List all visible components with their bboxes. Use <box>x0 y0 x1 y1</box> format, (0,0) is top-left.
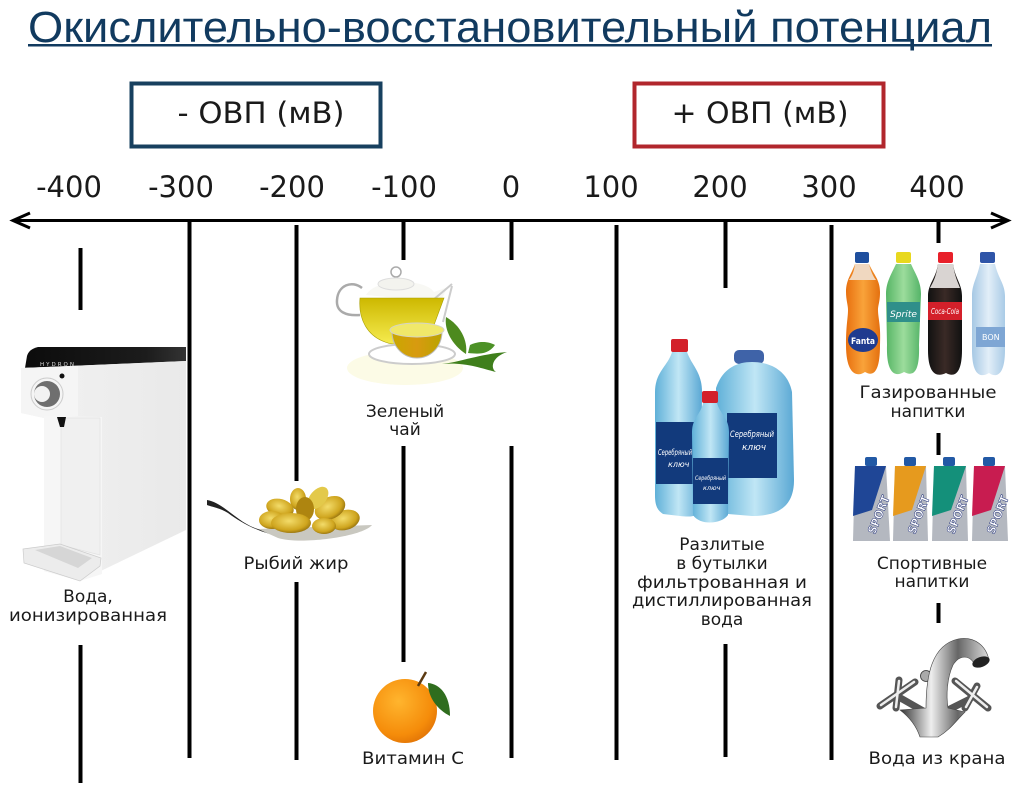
icon: bottled water <box>655 339 794 523</box>
scale numbers: 400 <box>909 170 965 204</box>
scale numbers: -100 <box>371 170 437 204</box>
icon: water ioniser: HYDRON <box>40 362 76 368</box>
label: sports drinks: Спортивные <box>877 554 987 574</box>
tall bottle <box>655 339 702 517</box>
scale numbers: -300 <box>148 170 214 204</box>
label: soda <box>860 383 996 422</box>
large canister <box>716 350 794 516</box>
label: soda: напитки <box>891 402 965 422</box>
label: tap water: Вода из крана <box>868 749 1006 769</box>
small bottle: ключ <box>703 484 721 492</box>
scale numbers: 300 <box>801 170 857 204</box>
label: soda: Газированные <box>860 383 996 403</box>
label: bottled water <box>632 535 812 630</box>
small bottle: Серебряный <box>695 474 726 482</box>
green bottle <box>886 252 921 374</box>
red carton: SPORT <box>984 493 1012 536</box>
label: vitamin C: Витамин С <box>362 749 464 769</box>
scale numbers <box>36 170 965 204</box>
scale numbers: -400 <box>36 170 102 204</box>
large canister: ключ <box>742 443 766 453</box>
label: sports drinks: напитки <box>895 572 969 592</box>
icon: tap <box>880 638 991 737</box>
tall bottle: ключ <box>668 460 690 469</box>
orange bottle <box>846 252 880 374</box>
blue carton <box>853 457 893 541</box>
scale numbers: 100 <box>583 170 639 204</box>
green carton <box>932 457 972 541</box>
icon: orange <box>373 672 450 743</box>
cola bottle: Coca-Cola <box>931 307 959 316</box>
green bottle: Sprite <box>890 310 917 320</box>
scale numbers: 0 <box>502 170 520 204</box>
tall bottle: Серебряный <box>658 448 692 457</box>
blue carton: SPORT <box>865 493 893 536</box>
label: green tea: чай <box>389 420 421 440</box>
label: ionised water: Вода, <box>63 587 113 607</box>
label: green tea: Зеленый <box>366 402 444 422</box>
label: bottled water: дистиллированная <box>632 591 812 611</box>
large canister: Серебряный <box>730 430 774 440</box>
small bottle <box>692 391 729 523</box>
orange carton <box>893 457 933 541</box>
label: bottled water: вода <box>701 610 743 630</box>
icon: green tea <box>337 267 507 385</box>
label: green tea <box>366 402 444 440</box>
orange carton: SPORT <box>905 493 933 536</box>
red carton <box>972 457 1012 541</box>
clear bottle: BON <box>982 333 1000 342</box>
positive ORP box: + ОВП (мВ) <box>672 96 848 130</box>
title: Окислительно-восстановительный потенциал <box>28 3 992 52</box>
icon: water ioniser <box>21 347 186 581</box>
negative ORP box <box>132 84 380 146</box>
negative ORP box: - ОВП (мВ) <box>178 96 344 130</box>
icon: fish oil spoon <box>207 483 372 541</box>
label: ionised water <box>9 587 167 626</box>
clear bottle <box>972 252 1005 375</box>
icon: soda bottles <box>846 252 1005 375</box>
positive ORP box <box>634 84 884 146</box>
orange bottle: Fanta <box>851 337 875 347</box>
scale numbers: -200 <box>259 170 325 204</box>
label: sports drinks <box>877 554 987 592</box>
icon: sports drinks <box>853 457 1012 541</box>
scale numbers: 200 <box>692 170 748 204</box>
label: ionised water: ионизированная <box>9 606 167 626</box>
green carton: SPORT <box>944 493 972 536</box>
cola bottle <box>928 252 962 375</box>
label: bottled water: Разлитые <box>679 535 765 555</box>
label: bottled water: в бутылки <box>676 554 768 574</box>
scale tick lines <box>80 222 938 783</box>
label: bottled water: фильтрованная и <box>637 573 807 593</box>
label: fish oil: Рыбий жир <box>244 554 348 574</box>
axis arrow <box>13 213 1008 228</box>
